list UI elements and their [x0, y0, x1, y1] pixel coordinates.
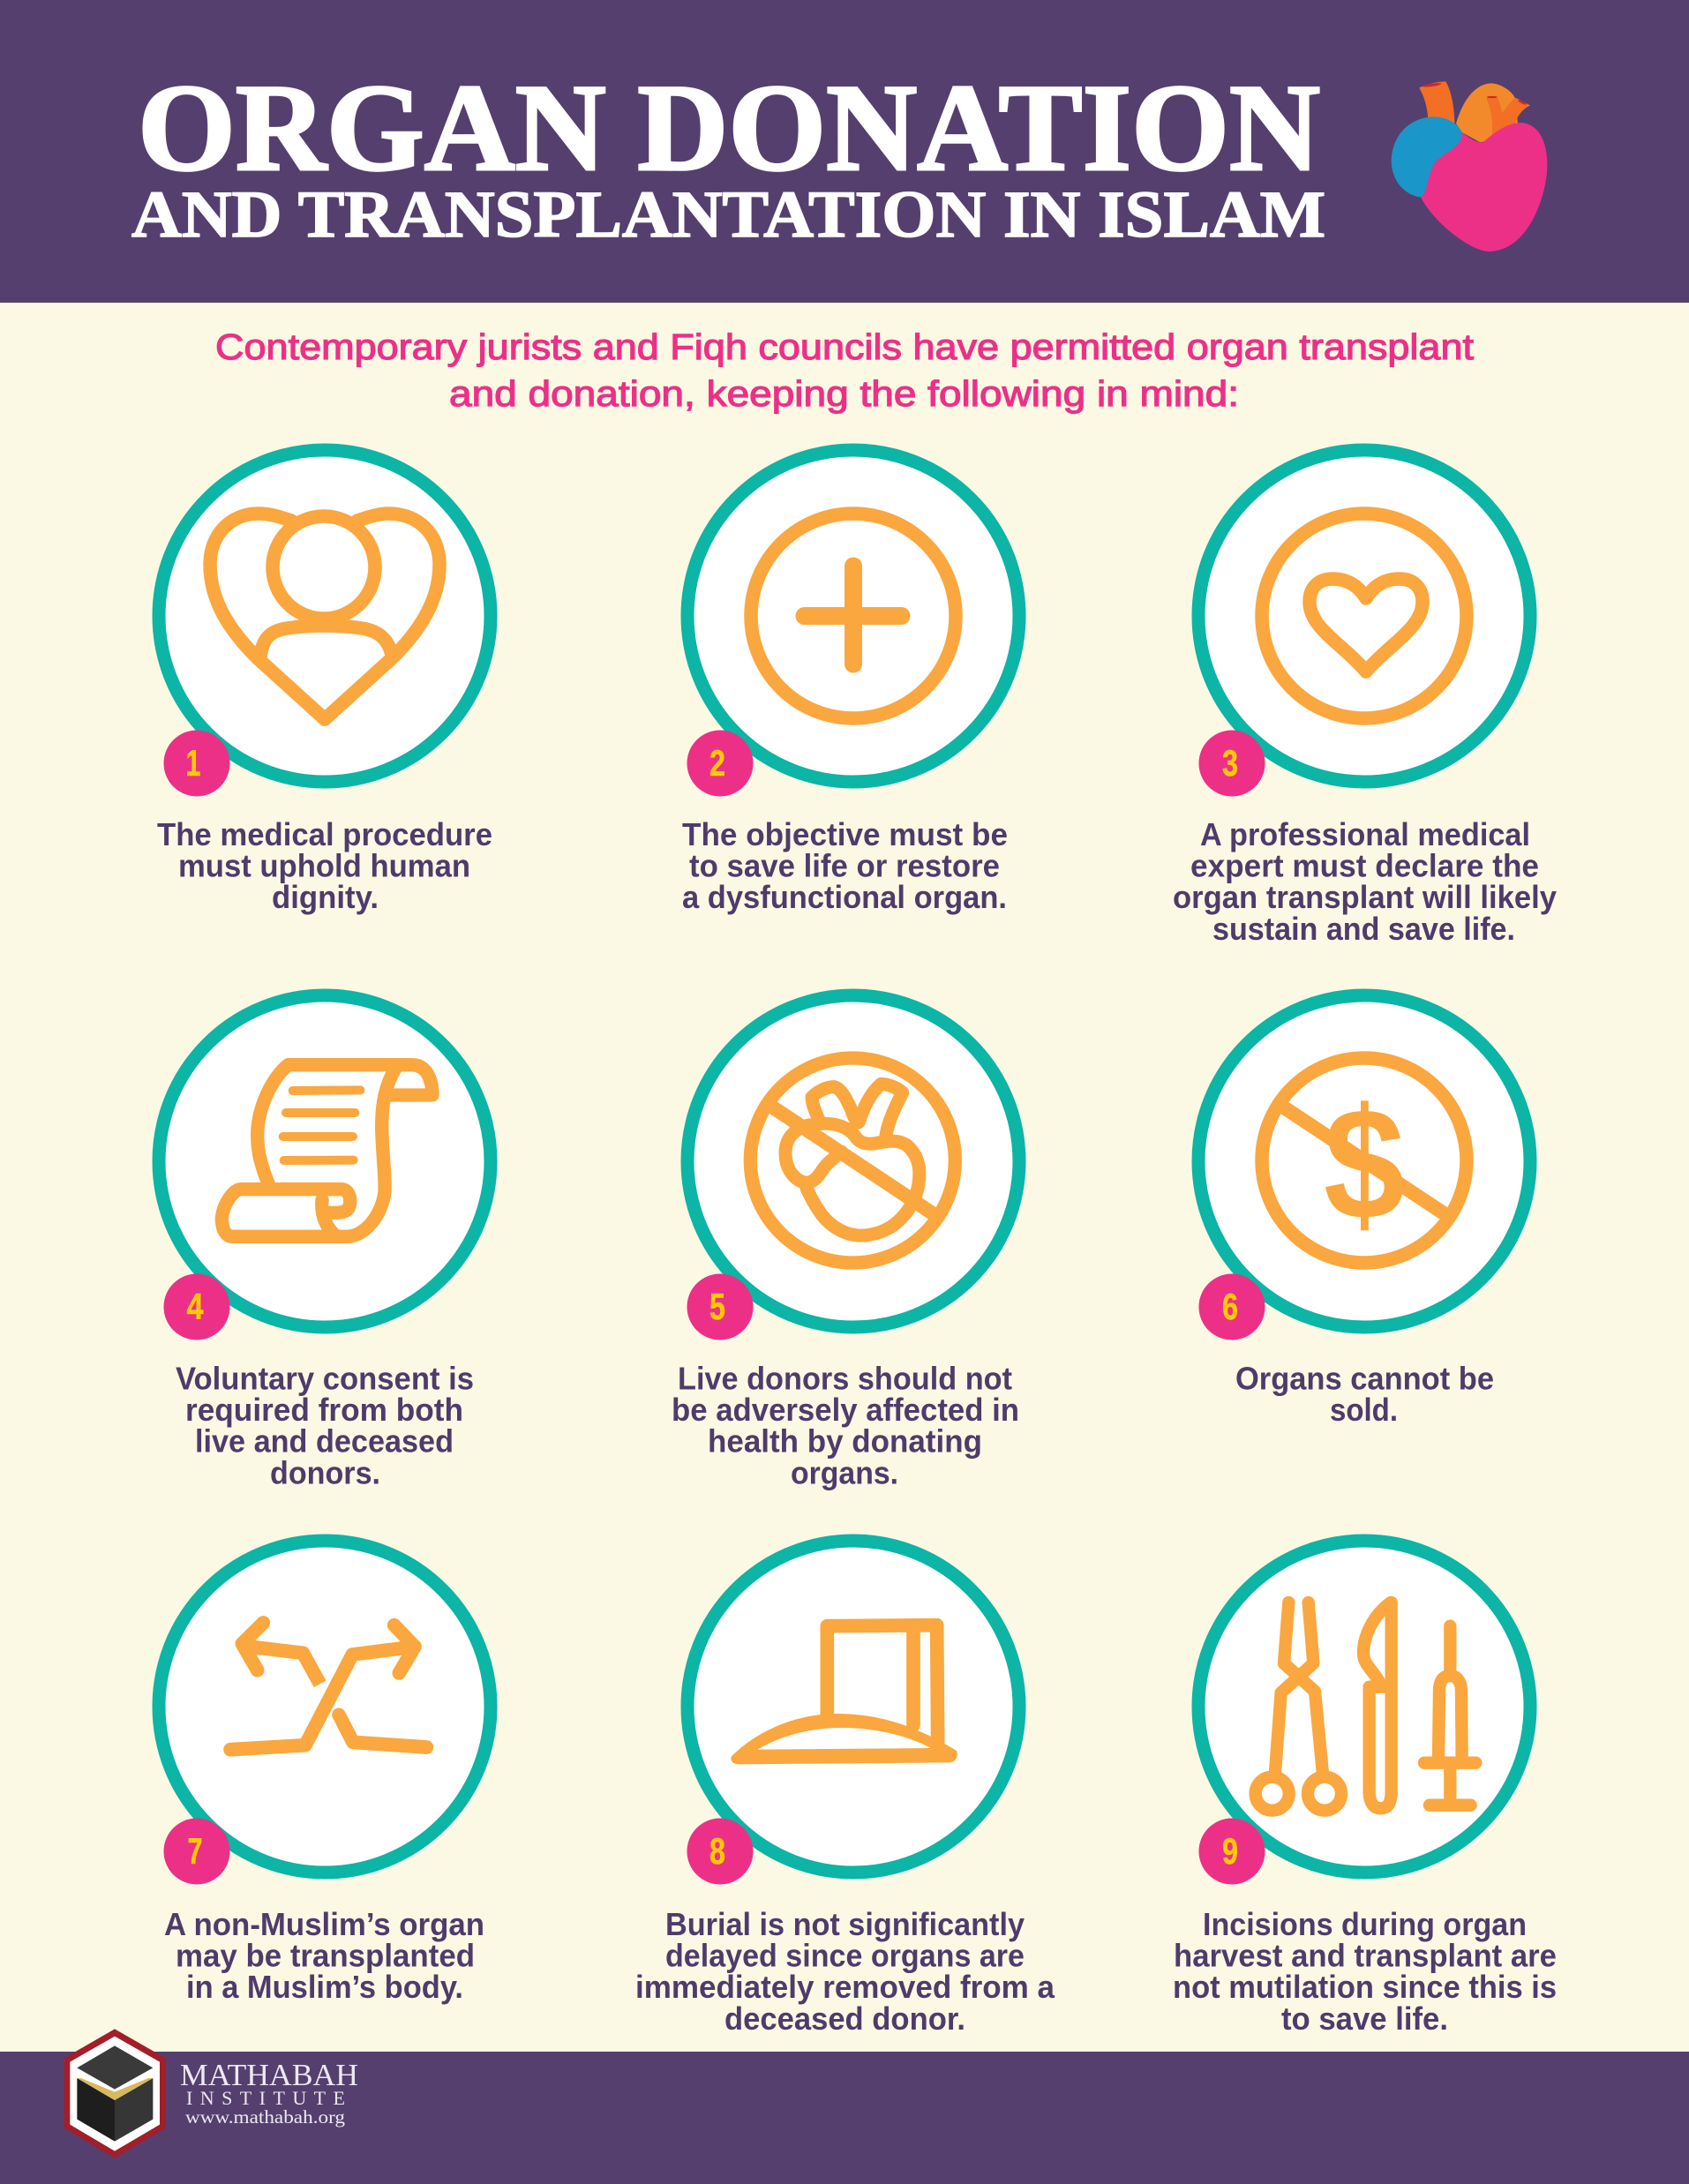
panel: item 5	[672, 995, 1019, 1491]
badge 9: 9	[1222, 1830, 1238, 1872]
text 5: organs.	[791, 1454, 898, 1491]
text 4: donors.	[270, 1454, 380, 1491]
panel: item 8	[635, 1541, 1055, 2037]
badge 3: 3	[1222, 742, 1238, 784]
icon: crossing arrows	[230, 1623, 426, 1750]
logo: Mathabah Institute	[64, 2029, 166, 2158]
icon: crossed-out dollar: $	[1324, 1075, 1405, 1253]
text 2: to save life or restore	[689, 848, 1000, 884]
text 3: expert must declare the	[1190, 848, 1539, 884]
text 4: required from both	[185, 1392, 463, 1428]
text 6	[1235, 1361, 1494, 1428]
badge 2	[687, 731, 754, 796]
icon: scroll	[221, 1065, 432, 1236]
text 7: in a Muslim’s body.	[186, 1969, 463, 2005]
text 9: to save life.	[1281, 2000, 1448, 2037]
subtitle: Contemporary jurists and Fiqh councils have permitted organ transplant	[215, 326, 1475, 367]
text 6: sold.	[1330, 1392, 1398, 1428]
panel: item 9	[1173, 1541, 1557, 2037]
badge 3	[1198, 731, 1265, 796]
logo wordmark	[180, 2058, 358, 2128]
badge 8	[687, 1818, 754, 1885]
logo wordmark: INSTITUTE	[186, 2087, 345, 2109]
header banner	[0, 0, 1689, 303]
badge 2: 2	[709, 742, 725, 784]
text 5: Live donors should not	[678, 1361, 1012, 1396]
panel: item 7	[159, 1541, 491, 2005]
badge 7: 7	[187, 1830, 203, 1872]
panel: item 2	[682, 450, 1019, 915]
subtitle: and donation, keeping the following in mind:	[449, 373, 1239, 414]
badge 4	[164, 1274, 229, 1340]
icon: heart in circle	[1262, 514, 1467, 718]
text 8: delayed since organs are	[665, 1938, 1025, 1974]
logo wordmark: www.mathabah.org	[185, 2106, 346, 2128]
icon: plus in circle	[751, 514, 956, 718]
text 9: harvest and transplant are	[1174, 1938, 1557, 1974]
panel: item 1	[157, 450, 492, 915]
icon: grave	[731, 1625, 957, 1764]
panel: item 6	[1198, 995, 1530, 1428]
subtitle	[215, 326, 1475, 414]
panel: item 4	[159, 995, 491, 1491]
text 2: The objective must be	[682, 816, 1008, 852]
title: AND TRANSPLANTATION IN ISLAM	[131, 178, 1325, 251]
text 7	[164, 1906, 484, 2005]
badge 9	[1198, 1818, 1265, 1885]
badge 4: 4	[187, 1286, 204, 1327]
text 1: The medical procedure	[157, 816, 492, 852]
text 1: must uphold human	[178, 848, 470, 884]
badge 1: 1	[185, 742, 201, 784]
icon: crossed-out heart	[750, 1058, 955, 1263]
text 4: Voluntary consent is	[176, 1361, 474, 1396]
text 9: not mutilation since this is	[1173, 1969, 1557, 2005]
text 8: immediately removed from a	[635, 1969, 1055, 2005]
badge 1	[164, 731, 229, 796]
text 8	[635, 1906, 1055, 2037]
icon: crossed-out dollar	[1262, 1058, 1467, 1263]
text 4: live and deceased	[195, 1422, 454, 1460]
text 2: a dysfunctional organ.	[682, 879, 1007, 915]
text 3: sustain and save life.	[1212, 911, 1515, 947]
badge 8: 8	[709, 1830, 725, 1872]
text 8: deceased donor.	[724, 2000, 965, 2037]
text 5: be adversely affected in	[672, 1392, 1019, 1428]
text 7: may be transplanted	[176, 1938, 475, 1974]
text 1	[157, 816, 492, 915]
text 3	[1173, 816, 1557, 947]
text 1: dignity.	[272, 879, 379, 915]
text 4	[176, 1361, 474, 1491]
badge 6: 6	[1222, 1286, 1238, 1327]
text 3: organ transplant will likely	[1173, 879, 1557, 915]
badge 5: 5	[709, 1286, 725, 1327]
panel: item 3	[1173, 450, 1557, 947]
text 8: Burial is not significantly	[665, 1906, 1025, 1942]
badge 6	[1198, 1274, 1265, 1340]
icon: heart	[1392, 81, 1547, 251]
icon: person in heart	[210, 514, 439, 719]
text 6: Organs cannot be	[1235, 1361, 1494, 1396]
title: ORGAN DONATION	[138, 59, 1320, 197]
text 2	[682, 816, 1008, 915]
text 7: A non-Muslim’s organ	[164, 1906, 484, 1942]
footer band	[0, 2052, 1689, 2184]
text 3: A professional medical	[1200, 816, 1530, 852]
logo wordmark: MATHABAH	[180, 2058, 358, 2092]
badge 7	[164, 1818, 229, 1885]
text 9	[1173, 1906, 1557, 2037]
badge 5	[687, 1274, 754, 1340]
text 9: Incisions during organ	[1203, 1906, 1527, 1942]
icon: surgical tools	[1256, 1602, 1475, 1811]
text 5	[672, 1361, 1019, 1491]
text 5: health by donating	[708, 1422, 982, 1460]
